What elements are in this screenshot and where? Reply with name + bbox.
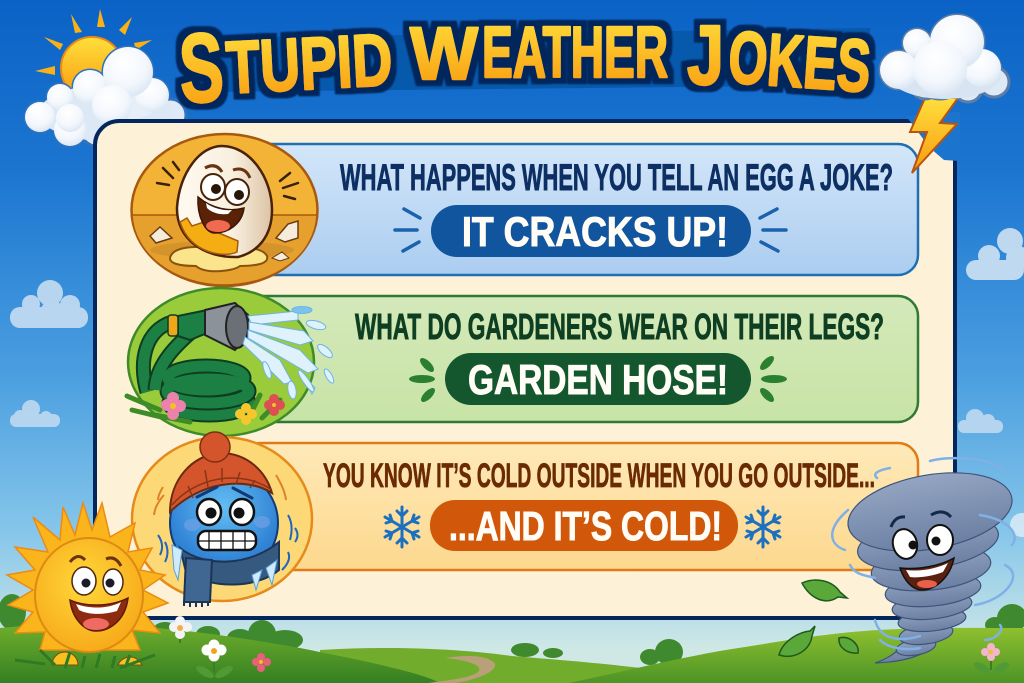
smiling sun character xyxy=(7,503,168,668)
word: Stupid: TUPID xyxy=(224,18,394,109)
small cloud lower left xyxy=(10,400,60,427)
joke row 2 xyxy=(240,296,918,422)
word: Stupid: S xyxy=(176,12,226,124)
word: Weather: EATHER xyxy=(482,13,668,93)
leaf small xyxy=(839,637,858,653)
icon: sun top left xyxy=(35,9,152,99)
snowflake left xyxy=(385,507,419,547)
row 3 answer pill: ...AND IT’S COLD! xyxy=(449,503,722,549)
egg yolk xyxy=(180,218,238,254)
tornado character xyxy=(832,458,1018,663)
water spray xyxy=(243,306,336,400)
word: Jokes xyxy=(687,8,873,108)
joke row 1 xyxy=(240,144,918,275)
scarf tail xyxy=(184,558,212,602)
torn panel corner xyxy=(906,112,960,161)
row 1 background xyxy=(240,144,918,275)
title band xyxy=(210,28,870,92)
small cloud left xyxy=(10,280,88,328)
title words xyxy=(176,3,873,124)
pink flower xyxy=(252,653,271,672)
word: Weather: W xyxy=(410,12,478,95)
leaf lower xyxy=(779,626,815,656)
white flower large xyxy=(194,640,235,680)
small cloud lower right xyxy=(958,409,1003,433)
main panel xyxy=(95,112,960,618)
word: Stupid xyxy=(176,3,395,124)
row 1 answer pill: IT CRACKS UP! xyxy=(462,208,728,255)
yolk splat xyxy=(170,247,267,271)
white flower small xyxy=(169,616,192,643)
tornado body xyxy=(842,461,1018,663)
icon: lightning bolt and storm cloud xyxy=(880,15,1009,173)
word: Jokes: OKES xyxy=(726,15,873,108)
flowers in grass xyxy=(169,616,1011,680)
flying leaves xyxy=(779,580,858,656)
hills and ground xyxy=(0,594,1024,683)
lightning bolt xyxy=(910,98,958,173)
small cloud right xyxy=(966,228,1024,280)
joke row 3 xyxy=(240,443,918,570)
wind swirls xyxy=(832,458,1015,649)
snowflake right xyxy=(746,507,780,547)
row 1 burst marks xyxy=(395,209,786,251)
row 2 answer pill: GARDEN HOSE! xyxy=(468,356,728,403)
row 2 background xyxy=(240,296,918,422)
icon: freezing blue ball xyxy=(132,432,312,607)
pink flower right xyxy=(972,643,1011,676)
word: Weather xyxy=(410,12,668,95)
icon: garden hose xyxy=(127,288,336,436)
storm cloud xyxy=(880,15,1009,102)
leaf upper xyxy=(802,580,847,601)
small cloud edge right xyxy=(1010,513,1024,537)
tornado face xyxy=(890,512,954,590)
scarf band xyxy=(180,542,279,585)
title xyxy=(176,3,873,124)
icon: cloud top left xyxy=(25,47,186,147)
hat xyxy=(170,453,272,512)
word: Jokes: J xyxy=(687,8,724,102)
row 2 leaf marks xyxy=(409,354,787,404)
row 3 background xyxy=(240,443,918,570)
icon: laughing egg xyxy=(132,134,318,286)
